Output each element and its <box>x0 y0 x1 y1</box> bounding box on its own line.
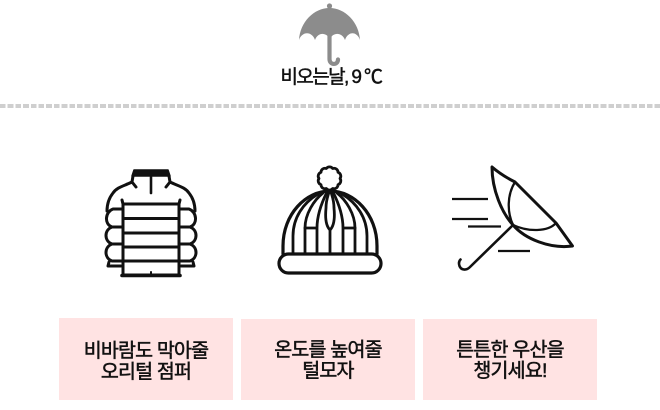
panel: sturdy umbrella tip: 챙기세요! <box>473 360 547 382</box>
weather label: 비오는날, 9 ℃ <box>281 67 381 88</box>
panel: knit hat tip: 온도를 높여줄 <box>274 339 382 361</box>
panel: sturdy umbrella tip <box>423 319 597 400</box>
panel: knit hat tip <box>241 319 415 400</box>
panel: down jacket tip: 비바람도 막아줄 <box>84 340 208 362</box>
panel: sturdy umbrella tip: 튼튼한 우산을 <box>456 339 564 361</box>
icon: umbrella <box>299 3 360 66</box>
panel: down jacket tip <box>59 318 233 400</box>
panel: knit hat tip: 털모자 <box>302 360 354 382</box>
panel: down jacket tip: 오리털 점퍼 <box>101 360 191 382</box>
